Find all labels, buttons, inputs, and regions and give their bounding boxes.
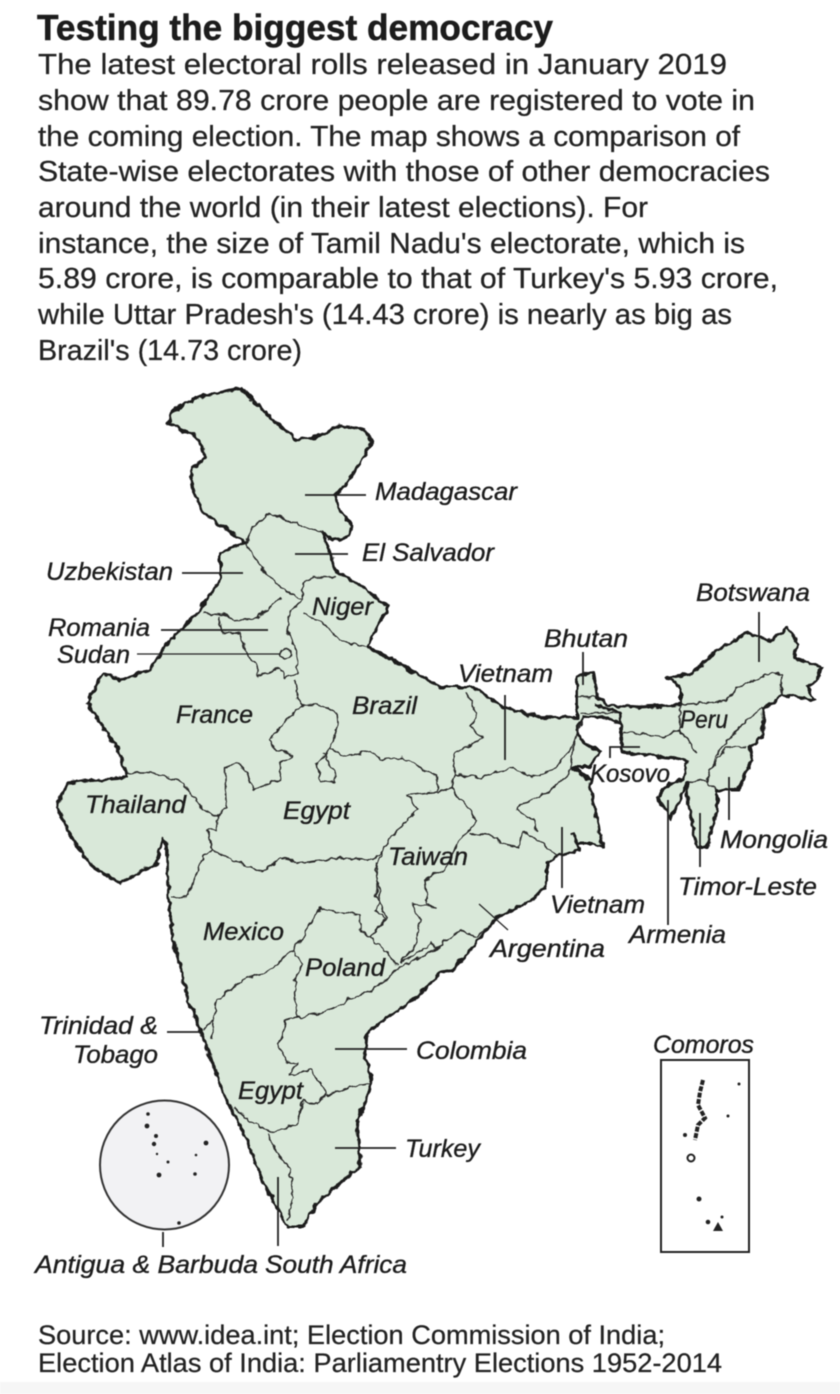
label: Thailand: Thailand — [85, 791, 187, 819]
source note: Election Atlas of India: Parliamentry Elections 1952-2014 — [38, 1348, 722, 1378]
label: El Salvador: El Salvador — [362, 539, 496, 567]
intro text block — [37, 49, 778, 367]
label: Botswana: Botswana — [696, 579, 810, 607]
intro text block: while Uttar Pradesh's (14.43 crore) is nearly as big as — [37, 299, 732, 331]
label: Kosovo — [590, 747, 670, 788]
label: Colombia: Colombia — [416, 1037, 527, 1065]
label: France: France — [176, 701, 253, 729]
inset: Andaman and Nicobar box labelled Comoros — [653, 1031, 754, 1252]
label: Argentina: Argentina — [488, 935, 605, 963]
label: Bhutan — [544, 625, 628, 685]
inset: Andaman and Nicobar box labelled Comoros: Comoros — [653, 1031, 754, 1059]
label: Taiwan: Taiwan — [388, 843, 468, 871]
label: Sudan: Sudan — [57, 641, 130, 669]
intro text block: show that 89.78 crore people are registered to vote in — [38, 85, 755, 117]
label: Turkey: Turkey — [405, 1135, 481, 1163]
label: Poland: Poland — [305, 954, 386, 982]
label: Mongolia — [720, 777, 828, 854]
label: Niger: Niger — [312, 593, 375, 621]
label: Vietnam east — [550, 827, 645, 919]
source note: Source: www.idea.int; Election Commission of India; — [38, 1320, 665, 1350]
label: Romania: Romania — [48, 614, 150, 642]
label: Vietnam north — [458, 660, 553, 760]
label: Peru: Peru — [680, 706, 728, 734]
label: Trinidad & Tobago: Tobago — [73, 1041, 158, 1069]
label: Armenia: Armenia — [627, 921, 726, 949]
label: Trinidad & Tobago — [39, 1012, 200, 1069]
label: Argentina — [479, 904, 605, 963]
label: Uzbekistan: Uzbekistan — [46, 558, 173, 586]
map: state boundaries — [127, 513, 783, 1220]
label: Madagascar: Madagascar — [375, 478, 519, 506]
label: Timor-Leste: Timor-Leste — [678, 873, 817, 901]
intro text block: around the world (in their latest elections). For — [38, 192, 648, 224]
inset: Lakshadweep circle labelled Antigua & Barbuda: Antigua & Barbuda — [33, 1251, 258, 1279]
title: Testing the biggest democracy — [37, 7, 553, 48]
label: Vietnam north: Vietnam — [458, 660, 553, 688]
source note — [38, 1320, 722, 1378]
intro text block: the coming election. The map shows a comparison of — [38, 121, 741, 153]
label: Egypt south: Egypt — [238, 1077, 304, 1105]
intro text block: State-wise electorates with those of other democracies — [38, 156, 770, 188]
inset: Lakshadweep circle labelled Antigua & Barbuda — [33, 1100, 258, 1279]
intro text block: 5.89 crore, is comparable to that of Turkey's 5.93 crore, — [38, 263, 778, 295]
label: Brazil: Brazil — [352, 692, 418, 720]
map: landmass and coastline — [57, 388, 822, 1227]
label: Mexico: Mexico — [203, 918, 284, 946]
intro text block: instance, the size of Tamil Nadu's electorate, which is — [38, 228, 745, 260]
label: Egypt north: Egypt — [283, 797, 351, 825]
map: thick Bangladesh-side borders — [595, 705, 688, 760]
label: Mongolia: Mongolia — [720, 826, 828, 854]
label: Kosovo: Kosovo — [590, 760, 670, 788]
map of India — [39, 388, 828, 1279]
label: South Africa: South Africa — [265, 1251, 407, 1279]
intro text block: The latest electoral rolls released in January 2019 — [38, 49, 727, 81]
label: Timor-Leste — [678, 813, 817, 901]
label: Bhutan: Bhutan — [544, 625, 628, 653]
label: Trinidad & Tobago: Trinidad & — [39, 1012, 158, 1040]
label: Vietnam east: Vietnam — [550, 891, 645, 919]
label: Botswana — [696, 579, 810, 662]
intro text block: Brazil's (14.73 crore) — [38, 335, 302, 367]
